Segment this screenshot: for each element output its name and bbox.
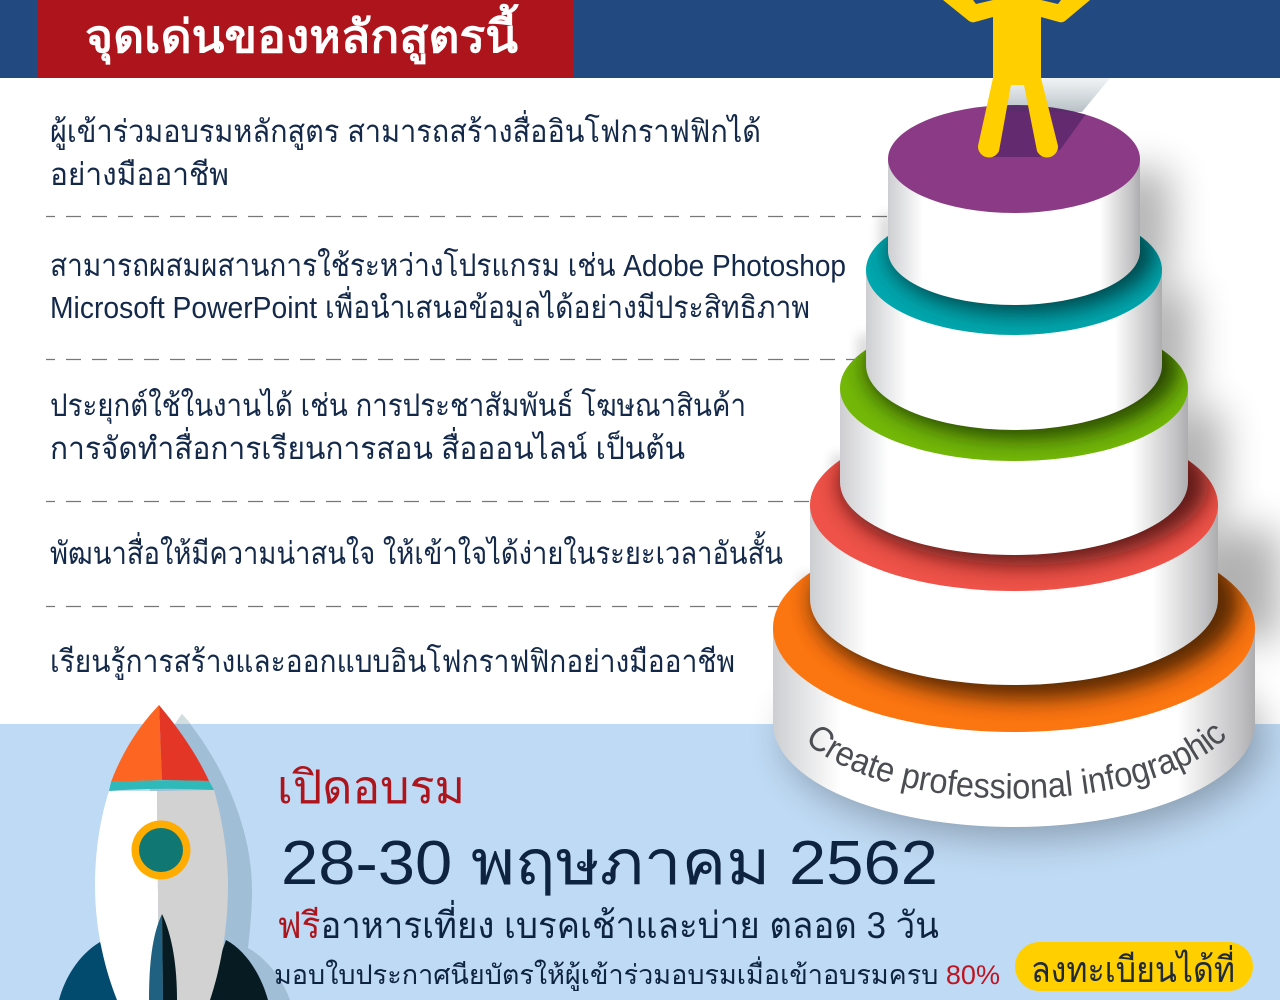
feature 1: ผู้เข้าร่วมอบรมหลักสูตร สามารถสร้างสื่ออินโฟกราฟฟิกได้ [50,110,761,150]
rocket shadow [150,714,290,1000]
feature 2 [50,248,846,326]
free meals line: ฟรีอาหารเที่ยง เบรคเช้าและบ่าย ตลอด 3 วัน [277,899,939,946]
tier 4 red [810,460,1218,685]
feature 3 [50,388,746,466]
teal band [109,780,214,791]
feature 5: เรียนรู้การสร้างและออกแบบอินโฟกราฟฟิกอย่างมืออาชีพ [50,644,735,680]
stacked cylinder tower [768,105,1280,858]
tier 5 orange [773,572,1255,827]
fins [59,942,120,1000]
tier 3 green [840,350,1188,555]
bottom light blue panel [0,724,1280,1000]
feature 2: Microsoft PowerPoint เพื่อนำเสนอข้อมูลได้อย่างมีประสิทธิภาพ [50,286,810,326]
certificate line: มอบใบประกาศนียบัตรให้ผู้เข้าร่วมอบรมเมื่อเข้าอบรมครบ 80% [274,956,1000,991]
feature 3: การจัดทำสื่อการเรียนการสอน สื่อออนไลน์ เป็นต้น [50,427,685,466]
nose cone [111,705,162,782]
feature 2: สามารถผสมผสานการใช้ระหว่างโปรแกรม เช่น Adobe Photoshop [50,248,846,283]
top header band [0,0,1280,78]
event details [274,761,1000,991]
tier 2 teal [866,236,1162,430]
heading tab [38,0,573,78]
opening label: เปิดอบรม [277,761,465,813]
feature 4: พัฒนาสื่อให้มีความน่าสนใจ ให้เข้าใจได้ง่ายในระยะเวลาอันสั้น [50,531,783,571]
feature 1: อย่างมืออาชีพ [50,157,229,192]
date: 28-30 พฤษภาคม 2562 [281,829,938,898]
register button: ลงทะเบียนได้ที่ [1031,945,1235,990]
feature 3: ประยุกต์ใช้ในงานได้ เช่น การประชาสัมพันธ์ โฆษณาสินค้า [50,388,746,425]
center fin [149,914,163,1000]
feature 1 [50,110,761,192]
icon: rocket [59,705,290,1000]
tier 1 purple [888,105,1140,305]
window [132,820,190,880]
icon: yellow figure [943,0,1090,157]
curved label: Create professional infographic [810,726,1225,799]
body [95,791,159,1000]
person shadow [1000,78,1110,112]
cast shadows [787,170,1280,836]
feature list [46,110,892,680]
heading tab: จุดเด่นของหลักสูตรนี้ [85,3,519,65]
